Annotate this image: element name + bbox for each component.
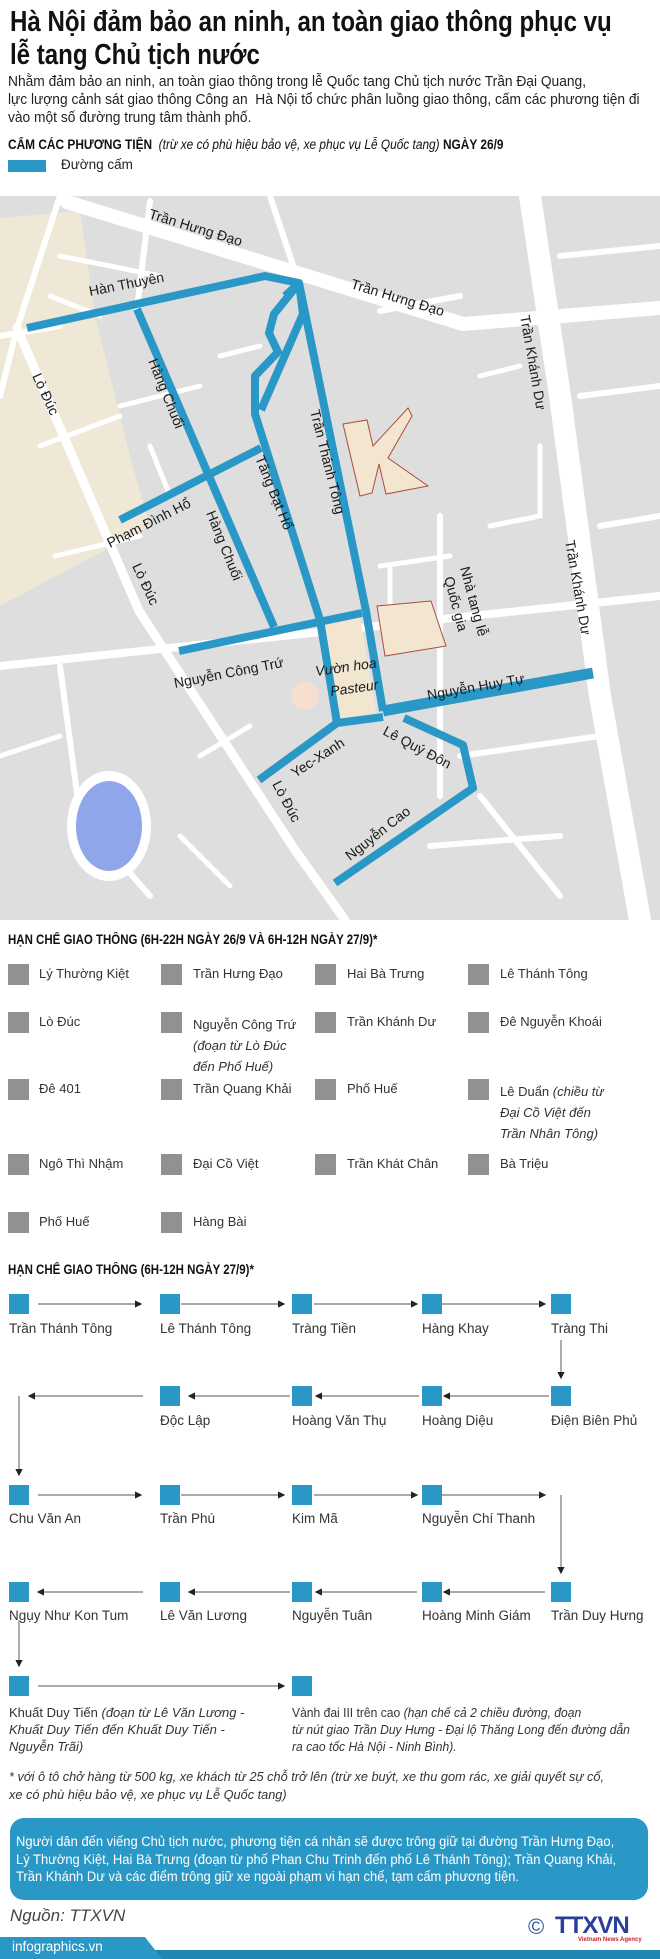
flow of restricted route: Tràng Thi bbox=[551, 1321, 608, 1336]
legend bbox=[8, 157, 133, 172]
flow of restricted route: Trần Phú bbox=[160, 1511, 215, 1526]
flow of restricted route: Hoàng Diệu bbox=[422, 1413, 493, 1428]
flow of restricted route: Độc Lập bbox=[160, 1413, 210, 1428]
flow of restricted route: Hàng Khay bbox=[422, 1321, 489, 1336]
map labels: Nhà tang lễ bbox=[457, 565, 491, 638]
last row labels: Khuất Duy Tiến (đoạn từ Lê Văn Lương - bbox=[9, 1705, 244, 1720]
intro text: vào một số đường trung tâm thành phố. bbox=[8, 110, 251, 126]
section heading: cấm phương tiện: CẤM CÁC PHƯƠNG TIỆN (trừ xe có phù hiệu bảo vệ, xe phục vụ Lễ Quốc tang) NGÀY 26/9 bbox=[8, 137, 503, 152]
legend: Đường cấm bbox=[61, 157, 133, 172]
title bbox=[10, 6, 612, 71]
flow of restricted route: Hoàng Minh Giám bbox=[422, 1608, 531, 1623]
logo TTXVN: Vietnam News Agency bbox=[578, 1937, 642, 1943]
grid of restricted streets: Đê Nguyễn Khoái bbox=[500, 1014, 602, 1029]
flow of restricted route: Kim Mã bbox=[292, 1511, 338, 1526]
grid of restricted streets: Hai Bà Trưng bbox=[347, 966, 424, 981]
title: lễ tang Chủ tịch nước bbox=[10, 39, 260, 71]
map labels: Hàng Chuối bbox=[203, 508, 246, 583]
grid of restricted streets: đến Phố Huế) bbox=[193, 1059, 273, 1074]
footer tab: infographics.vn bbox=[0, 1937, 162, 1959]
grid of restricted streets: Phố Huế bbox=[39, 1214, 90, 1229]
text: Vành đai III trên cao (hạn chế cả 2 chiều đường, đoạn bbox=[292, 1705, 581, 1720]
map labels: Trần Hưng Đạo bbox=[349, 276, 447, 319]
logo TTXVN: TTXVN bbox=[555, 1912, 629, 1939]
map labels: Vườn hoa bbox=[314, 655, 378, 679]
map labels: Tăng Bạt Hổ bbox=[252, 453, 297, 532]
flow of restricted route: Ngụy Như Kon Tum bbox=[9, 1608, 128, 1623]
flow of restricted route: Nguyễn Tuân bbox=[292, 1608, 372, 1623]
grid of restricted streets: Ngô Thì Nhậm bbox=[39, 1156, 123, 1171]
last row labels: Khuất Duy Tiến đến Khuất Duy Tiến - bbox=[9, 1722, 225, 1737]
banned roads bbox=[27, 276, 593, 883]
text: ra cao tốc Hà Nội - Ninh Bình). bbox=[292, 1739, 457, 1754]
intro text: Nhằm đảm bảo an ninh, an toàn giao thông trong lễ Quốc tang Chủ tịch nước Trần Đại Quang, bbox=[8, 74, 586, 90]
map labels: Hàn Thuyên bbox=[88, 269, 165, 299]
flow of restricted route: Lê Văn Lương bbox=[160, 1608, 247, 1623]
map labels: Hàng Chuối bbox=[145, 356, 188, 431]
intro text bbox=[8, 73, 640, 126]
footnote: * với ô tô chở hàng từ 500 kg, xe khách từ 25 chỗ trở lên (trừ xe buýt, xe thu gom rác, xe giải quyết sự cố, bbox=[9, 1769, 604, 1784]
building Nhà tang lễ bbox=[377, 601, 446, 656]
grid of restricted streets: Lò Đúc bbox=[39, 1014, 80, 1029]
flow of restricted route: Điện Biên Phủ bbox=[551, 1413, 637, 1428]
grid of restricted streets: Lê Thánh Tông bbox=[500, 966, 588, 981]
grid of restricted streets: Lê Duẩn (chiều từ bbox=[500, 1084, 604, 1099]
logo TTXVN: © bbox=[528, 1914, 544, 1939]
map labels: Yec-Xanh bbox=[288, 734, 347, 781]
grid of restricted streets: Trần Hưng Đạo bbox=[193, 966, 283, 981]
grid of restricted streets: Bà Triệu bbox=[500, 1156, 548, 1171]
grid of restricted streets: Hàng Bài bbox=[193, 1214, 246, 1229]
intro text: lực lượng cảnh sát giao thông Công an Hà Nội tổ chức phân luồng giao thông, cấm các phương tiện đi bbox=[8, 92, 640, 108]
map labels: Trần Khánh Dư bbox=[517, 314, 549, 411]
map labels: Trần Thánh Tông bbox=[307, 408, 349, 516]
section heading: hạn chế 26/9: HẠN CHẾ GIAO THÔNG (6H-22H NGÀY 26/9 VÀ 6H-12H NGÀY 27/9)* bbox=[8, 932, 377, 947]
grid of restricted streets: Nguyễn Công Trứ bbox=[193, 1017, 296, 1032]
grid of restricted streets: Trần Nhân Tông) bbox=[500, 1126, 598, 1141]
grid of restricted streets: Trần Khát Chân bbox=[347, 1156, 438, 1171]
map labels: Trần Khánh Dư bbox=[562, 539, 594, 636]
map labels: Nguyễn Huy Tự bbox=[426, 670, 526, 703]
flow of restricted route bbox=[9, 1294, 644, 1696]
source: Nguồn: TTXVN bbox=[10, 1906, 125, 1925]
last row labels bbox=[9, 1705, 244, 1754]
flow of restricted route: Nguyễn Chí Thanh bbox=[422, 1511, 535, 1526]
callout box bbox=[10, 1818, 648, 1900]
flow of restricted route: Tràng Tiền bbox=[292, 1321, 356, 1336]
footnote: xe có phù hiệu bảo vệ, xe phục vụ Lễ Quốc tang) bbox=[9, 1787, 287, 1802]
lake bbox=[67, 771, 151, 881]
section heading: hạn chế 27/9: HẠN CHẾ GIAO THÔNG (6H-12H NGÀY 27/9)* bbox=[8, 1262, 254, 1277]
map labels: Lò Đúc bbox=[269, 778, 304, 825]
grid of restricted streets: Lý Thường Kiệt bbox=[39, 966, 129, 981]
map labels: Nguyễn Công Trứ bbox=[173, 654, 285, 691]
grid of restricted streets: Phố Huế bbox=[347, 1081, 398, 1096]
text: từ nút giao Trần Duy Hưng - Đại lộ Thăng Long đến đường dẫn bbox=[292, 1722, 630, 1737]
flow of restricted route: Lê Thánh Tông bbox=[160, 1321, 251, 1336]
map labels: Nguyễn Cao bbox=[342, 803, 413, 863]
map labels: Lò Đúc bbox=[129, 561, 163, 607]
map labels: Quốc gia bbox=[441, 575, 471, 633]
flow of restricted route: Hoàng Văn Thụ bbox=[292, 1413, 386, 1428]
footnote bbox=[8, 1769, 604, 1802]
map labels: Phạm Đình Hổ bbox=[104, 495, 193, 551]
callout box: Trần Khánh Dư và các điểm trông giữ xe ngoài phạm vi hạn chế, tạm cấm phương tiện. bbox=[16, 1869, 519, 1884]
map bbox=[0, 196, 660, 920]
footer tab: infographics.vn: infographics.vn bbox=[12, 1939, 103, 1954]
flow of restricted route: Trần Duy Hưng bbox=[551, 1608, 644, 1623]
map labels bbox=[29, 206, 594, 863]
bottom bar bbox=[0, 1950, 660, 1959]
grid of restricted streets: Đại Cồ Việt bbox=[193, 1156, 259, 1171]
grid of restricted streets: (đoạn từ Lò Đúc bbox=[193, 1038, 287, 1053]
map labels: Lò Đúc bbox=[29, 371, 63, 417]
logo TTXVN bbox=[528, 1912, 642, 1943]
callout box: Người dân đến viếng Chủ tịch nước, phương tiện cá nhân sẽ được trông giữ tại đường Trần Hưng Đạo, bbox=[16, 1834, 614, 1849]
grid of restricted streets bbox=[8, 964, 604, 1233]
map labels: Pasteur bbox=[329, 676, 381, 699]
grid of restricted streets: Đê 401 bbox=[39, 1081, 81, 1096]
grid of restricted streets: Trần Khánh Dư bbox=[347, 1014, 436, 1029]
Vườn hoa Pasteur bbox=[322, 618, 377, 723]
building K bbox=[343, 408, 428, 496]
flow of restricted route: Chu Văn An bbox=[9, 1511, 81, 1526]
map labels: Lê Quý Đôn bbox=[381, 723, 454, 772]
last row labels: Nguyễn Trãi) bbox=[9, 1739, 83, 1754]
grid of restricted streets: Đại Cồ Việt đến bbox=[500, 1105, 591, 1120]
title: Hà Nội đảm bảo an ninh, an toàn giao thông phục vụ bbox=[10, 6, 612, 38]
flow of restricted route: Trần Thánh Tông bbox=[9, 1321, 112, 1336]
callout box: Lý Thường Kiệt, Hai Bà Trưng (đoạn từ phố Phan Chu Trinh đến phố Lê Thánh Tông); Trần Quang Khải, bbox=[16, 1852, 616, 1866]
map labels: Trần Hưng Đạo bbox=[147, 206, 245, 249]
grid of restricted streets: Trần Quang Khải bbox=[193, 1081, 292, 1096]
